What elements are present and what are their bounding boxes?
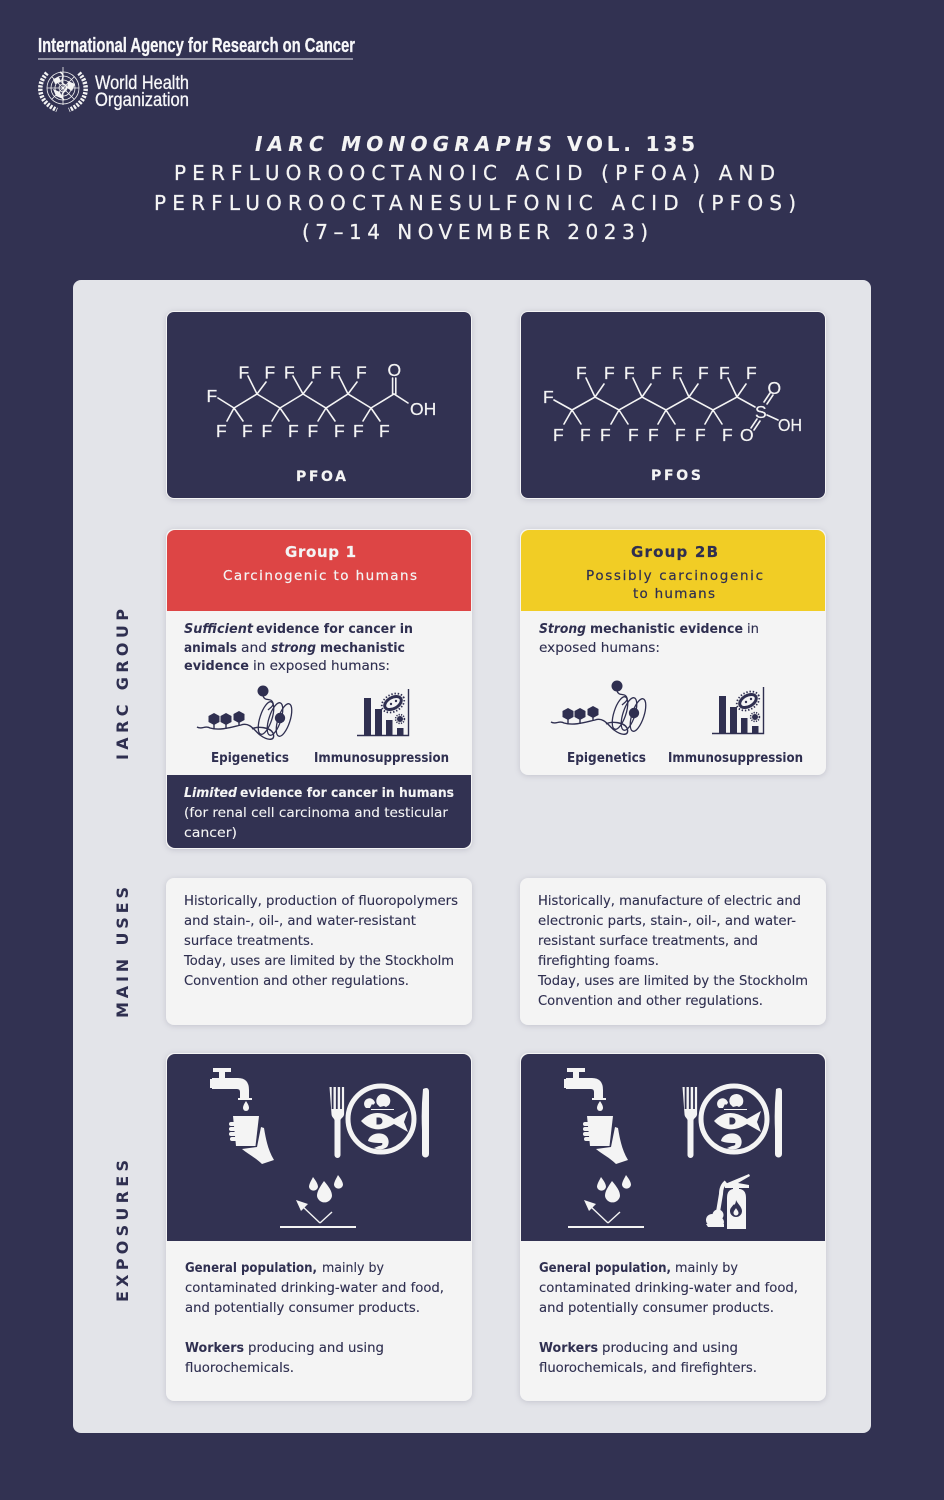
chart: PFOA molecule: F [288, 421, 299, 441]
title: PERFLUOROOCTANOIC ACID (PFOA) AND [174, 161, 775, 185]
text: PFOA exposure: mainly by [322, 1260, 384, 1276]
footer: limited evidence: Limited [184, 785, 237, 801]
title: (7–14 NOVEMBER 2023) [302, 220, 648, 244]
text: PFOA exposure: producing and using [248, 1340, 384, 1356]
icon: immunosuppression [357, 689, 408, 736]
label: epigenetics: Epigenetics [567, 750, 646, 766]
header: Group 1 [167, 530, 471, 611]
WHO name: World Health [95, 73, 189, 94]
text: PFOS exposure: mainly by [675, 1260, 738, 1276]
main light panel [73, 280, 871, 1433]
chart: PFOA molecule: F [264, 362, 275, 382]
panel: PFOS main uses: Convention and other regulations. [538, 993, 763, 1009]
text: strong evidence: Strong [539, 621, 586, 637]
title: VOL. 135 [567, 132, 695, 156]
header: Group 2B: Group 2B [631, 543, 718, 561]
chart: PFOS molecule: S [755, 402, 767, 422]
panel: PFOS main uses: firefighting foams. [538, 953, 659, 969]
chart: PFOA molecule: F [311, 362, 322, 382]
text: PFOA exposure: and potentially consumer products. [185, 1300, 420, 1316]
text: PFOA exposure: fluorochemicals. [185, 1360, 294, 1376]
panel: PFOS main uses [520, 878, 826, 1025]
icon: water-repellent surface [280, 1175, 356, 1228]
chart: PFOA molecule: F [334, 421, 345, 441]
text: sufficient evidence: evidence for cancer in [256, 621, 413, 637]
chart: PFOS molecule: F [695, 425, 706, 445]
chart: PFOS molecule: F [576, 363, 587, 383]
icon: epigenetics [197, 686, 295, 739]
text: sufficient evidence: Sufficient [184, 621, 254, 637]
title: PERFLUOROOCTANESULFONIC ACID (PFOS) [154, 191, 796, 215]
chart: PFOA molecule: F [353, 421, 364, 441]
icon: plate of food [682, 1086, 782, 1158]
chart: PFOA molecule: F [206, 386, 217, 406]
text: sufficient evidence [184, 621, 413, 674]
chart: PFOS molecule: F [746, 363, 757, 383]
panel: PFOA main uses: Convention and other regulations. [184, 973, 409, 989]
chart: PFOA molecule: F [284, 362, 295, 382]
chart: PFOS molecule: F [672, 363, 683, 383]
panel: PFOS main uses: Historically, manufacture of electric and [538, 893, 801, 909]
text: PFOS exposure [539, 1260, 798, 1376]
chart: PFOS molecule: F [698, 363, 709, 383]
chart: PFOA molecule: OH [410, 399, 436, 419]
text: sufficient evidence: strong [271, 640, 316, 656]
icon: immunosuppression [712, 687, 764, 734]
title: IARC MONOGRAPHS [255, 132, 552, 156]
text: PFOS exposure: contaminated drinking-water and food, [539, 1280, 798, 1296]
chart: PFOA molecule: F [330, 362, 341, 382]
chart: PFOA molecule: F [308, 421, 318, 441]
chart: PFOS molecule: F [651, 363, 662, 383]
row label: exposures: EXPOSURES [113, 1160, 132, 1302]
icon: fire extinguisher [706, 1174, 750, 1229]
panel: PFOS main uses: electronic parts, stain-, oil-, and water- [538, 913, 796, 929]
panel: PFOA main uses: Today, uses are limited by the Stockholm [183, 953, 454, 969]
chart: PFOA molecule [206, 360, 436, 441]
panel: PFOA main uses: and stain-, oil-, and water-resistant [184, 913, 416, 929]
icon: plate of food [330, 1086, 429, 1158]
text: PFOS exposure: fluorochemicals, and firefighters. [539, 1360, 757, 1376]
text: sufficient evidence: mechanistic [320, 640, 405, 656]
chart: PFOS molecule [543, 363, 802, 445]
chart: PFOS molecule: F [580, 425, 591, 445]
icon: tap and glass [210, 1068, 274, 1164]
panel: Group 1 [166, 529, 472, 849]
panel: PFOA main uses [166, 878, 472, 1025]
title [154, 132, 796, 244]
icon: water-repellent surface [568, 1175, 644, 1228]
chart: PFOS molecule: F [628, 425, 639, 445]
chart: PFOA molecule: F [356, 362, 367, 382]
text: strong evidence: exposed humans: [539, 640, 660, 656]
chart: PFOS molecule: OH [778, 415, 802, 435]
panel: PFOA exposures [166, 1053, 472, 1401]
text: PFOA exposure: Workers [185, 1340, 244, 1356]
IARC name: International Agency for Research on Cancer [38, 35, 355, 57]
text: strong evidence: mechanistic evidence [590, 621, 743, 637]
chart: PFOS molecule: O [768, 378, 781, 398]
icon: tap and glass [564, 1068, 628, 1164]
logo: IARC and WHO: Organization [95, 90, 189, 111]
chart: PFOS molecule: F [624, 363, 635, 383]
text: PFOS exposure: producing and using [602, 1340, 738, 1356]
icon: WHO emblem [40, 67, 86, 110]
chart: PFOS molecule: F [604, 363, 615, 383]
text: sufficient evidence: animals [184, 640, 237, 656]
label: epigenetics: Epigenetics [211, 750, 289, 766]
text: PFOA exposure: General population, [185, 1260, 317, 1276]
footer: limited evidence: evidence for cancer in humans [240, 785, 454, 801]
chart: PFOA molecule: F [238, 362, 249, 382]
text: PFOS exposure: and potentially consumer products. [539, 1300, 774, 1316]
text: PFOS exposure: General population, [539, 1260, 671, 1276]
chart: PFOS molecule: F [543, 387, 554, 407]
chart: PFOS molecule: F [648, 425, 659, 445]
label: immunosuppression: Immunosuppression [668, 750, 803, 766]
text: sufficient evidence: in exposed humans: [253, 658, 390, 674]
row label: IARC group: IARC GROUP [113, 609, 132, 760]
label: PFOS: PFOS [651, 468, 701, 484]
text: strong evidence: in [747, 621, 759, 637]
footer: limited evidence: (for renal cell carcinoma and testicular [184, 805, 448, 821]
label: PFOA: PFOA [296, 469, 346, 485]
panel: PFOA main uses: surface treatments. [184, 933, 314, 949]
icon: epigenetics [551, 680, 649, 734]
chart: PFOS molecule: F [722, 425, 733, 445]
text: PFOS exposure: Workers [539, 1340, 598, 1356]
text: PFOA exposure [185, 1260, 444, 1376]
chart: PFOS molecule: O [740, 425, 754, 445]
header: Group 2B [521, 530, 825, 611]
chart: PFOS molecule: F [553, 425, 564, 445]
footer: limited evidence [167, 775, 471, 848]
panel: PFOS structure [520, 311, 826, 499]
panel: PFOS exposures [520, 1053, 826, 1401]
chart: PFOS molecule: F [600, 425, 611, 445]
text: strong evidence [539, 621, 759, 656]
chart: PFOA molecule: F [242, 421, 253, 441]
chart: PFOS molecule: F [719, 363, 730, 383]
logo: IARC and WHO [38, 35, 355, 111]
panel: PFOA main uses: Historically, production of fluoropolymers [184, 893, 458, 909]
chart: PFOA molecule: F [262, 421, 272, 441]
row label: main uses: MAIN USES [113, 887, 132, 1018]
text: sufficient evidence: evidence [184, 658, 249, 674]
header: Group 1: Carcinogenic to humans [223, 568, 417, 584]
text: sufficient evidence: and [241, 640, 267, 656]
chart: PFOA molecule: F [379, 421, 390, 441]
chart: PFOA molecule: O [388, 360, 401, 380]
panel: PFOS main uses: Today, uses are limited by the Stockholm [537, 973, 808, 989]
label: immunosuppression: Immunosuppression [314, 750, 449, 766]
chart: PFOA molecule: F [216, 421, 227, 441]
panel: PFOS main uses: resistant surface treatments, and [538, 933, 758, 949]
header: Group 2B: to humans [633, 586, 715, 602]
footer: limited evidence: cancer) [184, 825, 237, 841]
panel: Group 2B [520, 529, 826, 775]
header: Group 2B: Possibly carcinogenic [586, 568, 763, 584]
panel: PFOA structure [166, 311, 472, 499]
chart: PFOS molecule: F [675, 425, 686, 445]
text: PFOA exposure: contaminated drinking-water and food, [185, 1280, 444, 1296]
header: Group 1: Group 1 [285, 543, 356, 561]
